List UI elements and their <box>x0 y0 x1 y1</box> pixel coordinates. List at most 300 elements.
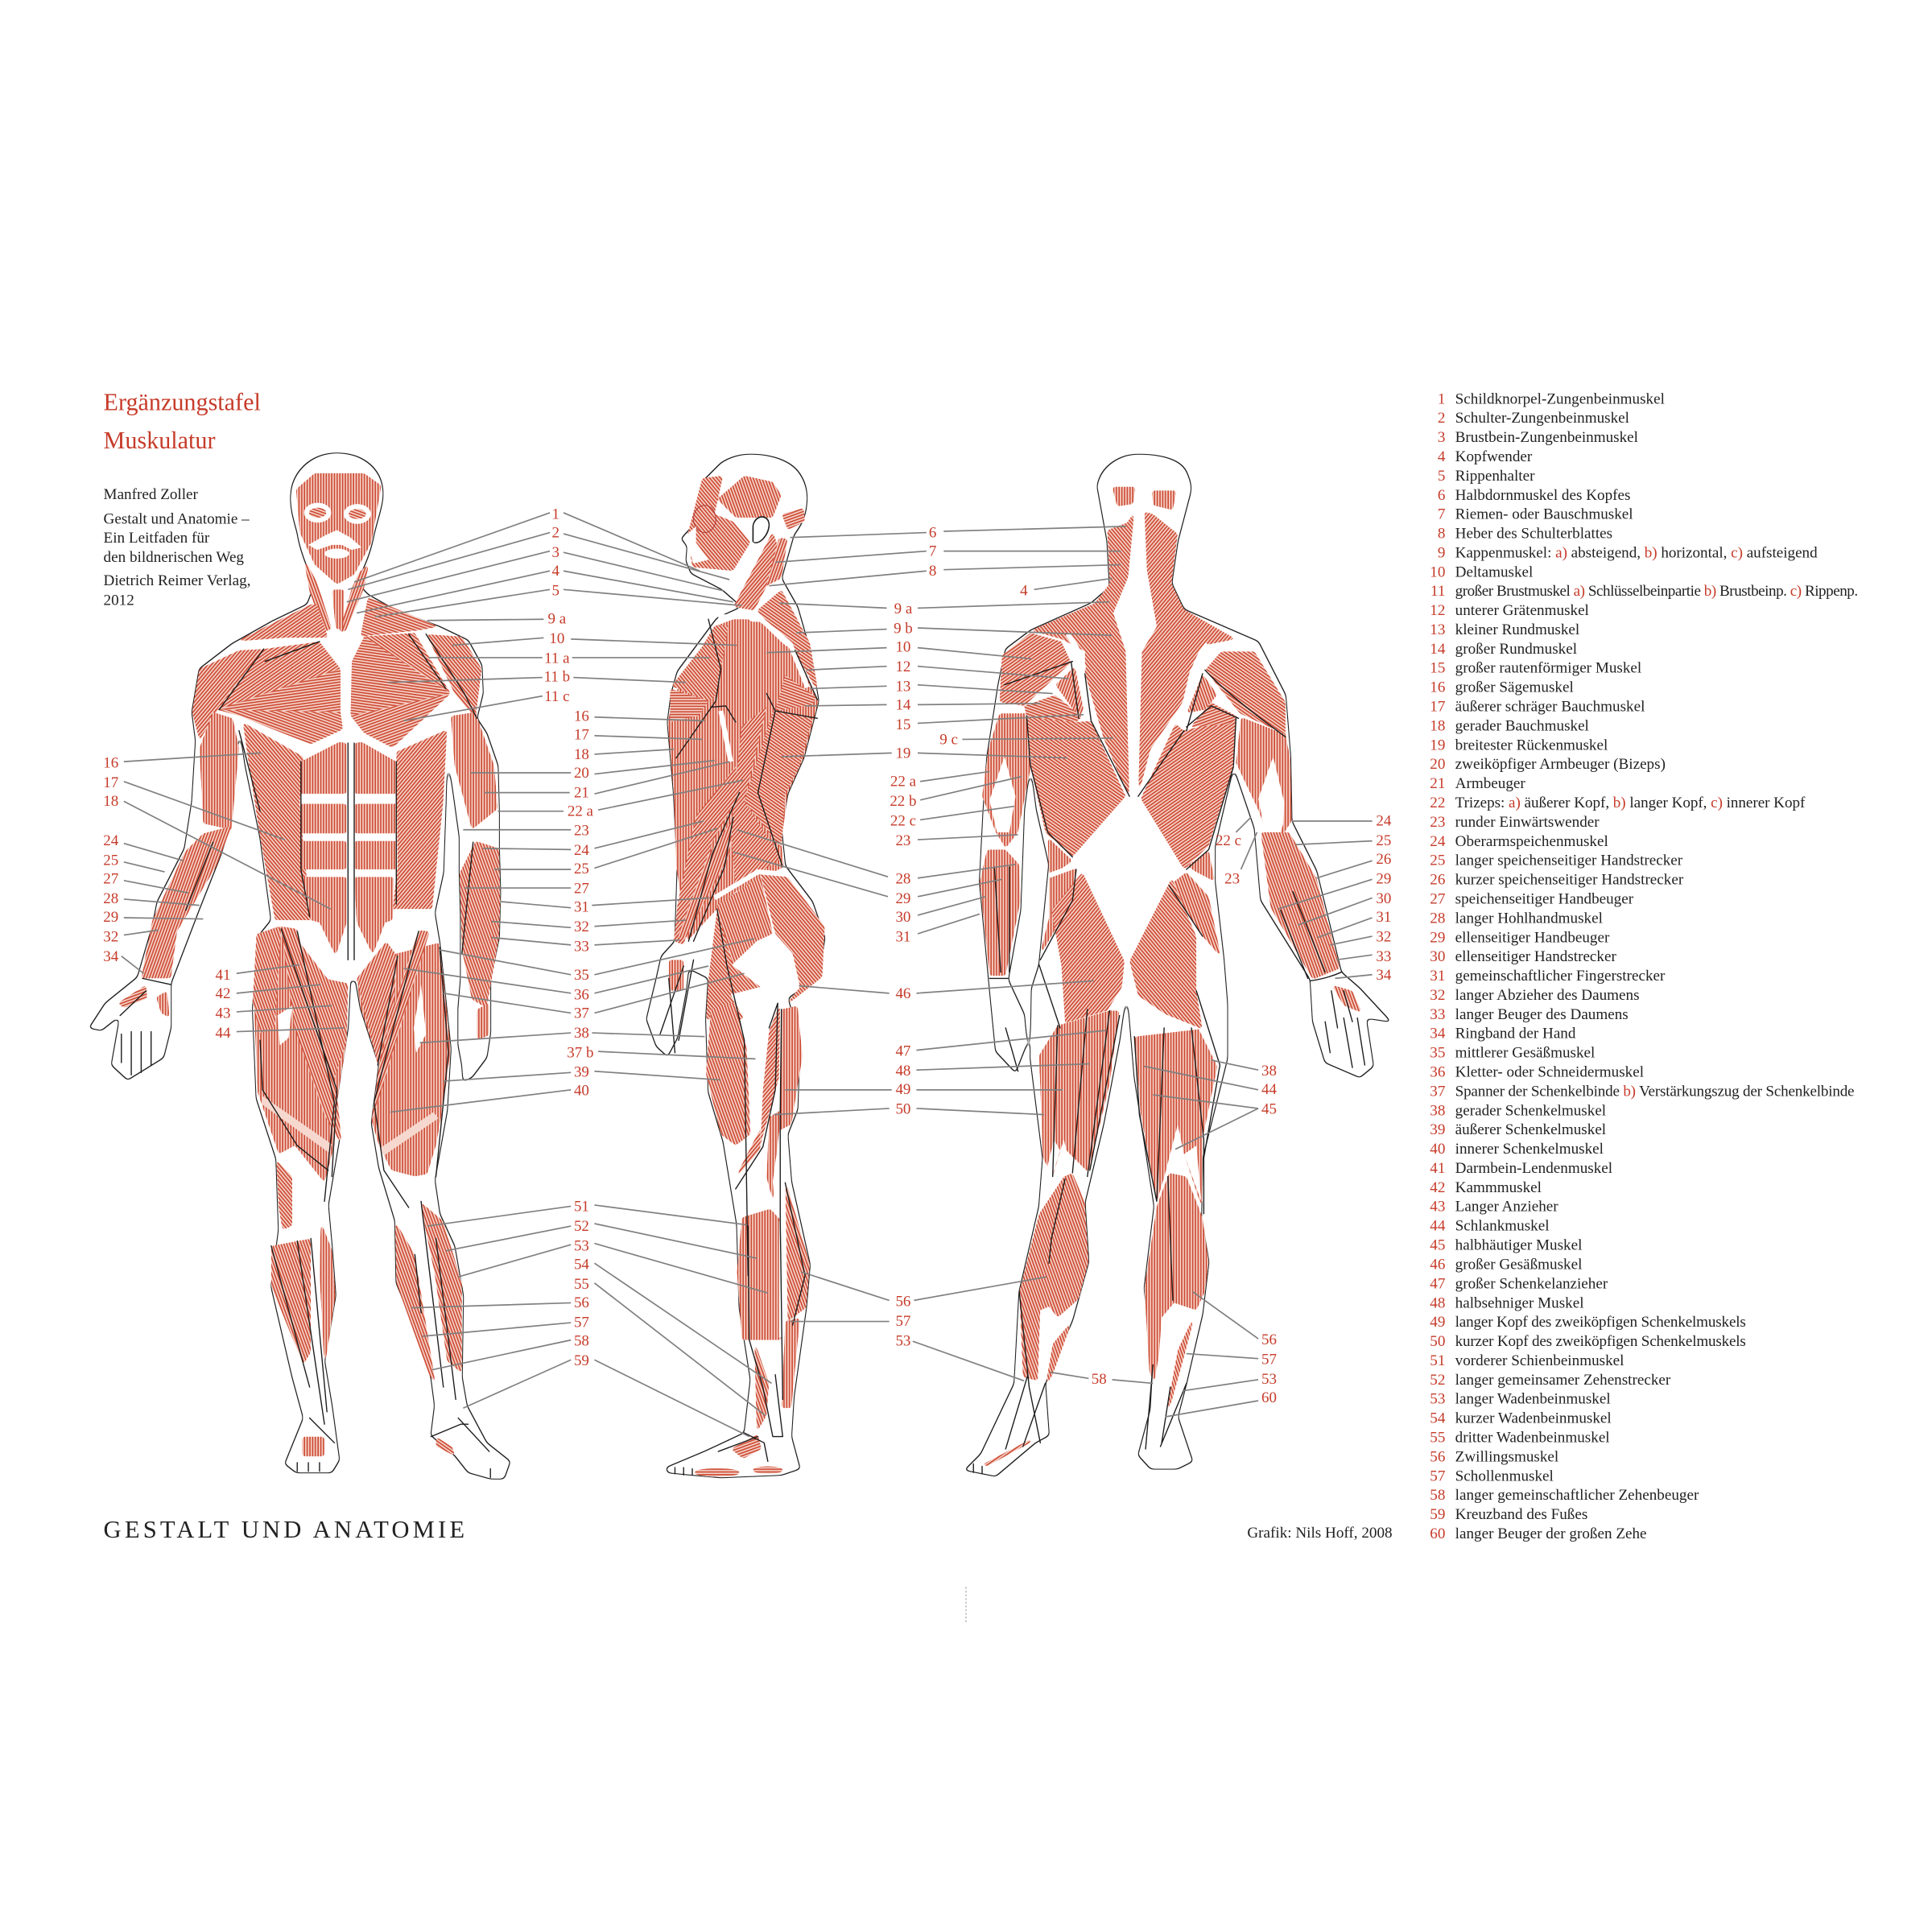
legend list of muscles 1 to 60: 35 <box>1430 1045 1445 1062</box>
number labels: first middle column: 56 <box>574 1294 589 1311</box>
number labels: first middle column: 39 <box>574 1064 589 1081</box>
biceps left <box>200 712 239 830</box>
number labels: right of back figure: 44 <box>1261 1081 1278 1098</box>
legend list of muscles 1 to 60: Schildknorpel-Zungenbeinmuskel <box>1455 390 1665 407</box>
hamstrings right <box>1134 1029 1217 1210</box>
number labels: first middle column: 32 <box>574 919 589 935</box>
calf right back <box>1145 1173 1209 1383</box>
number labels: first middle column <box>544 506 594 1369</box>
number labels: first middle column: 22 a <box>568 803 594 819</box>
number labels: right of back figure: 38 <box>1261 1063 1277 1080</box>
number labels: first middle column: 53 <box>574 1238 589 1255</box>
number labels: second middle column: 13 <box>895 679 910 696</box>
legend list of muscles 1 to 60: kurzer Wadenbeinmuskel <box>1455 1410 1612 1427</box>
biceps side <box>702 707 731 786</box>
number labels: first middle column: 11 b <box>544 668 570 685</box>
legend list of muscles 1 to 60: langer Beuger des Daumens <box>1455 1006 1629 1023</box>
legend list of muscles 1 to 60: Heber des Schulterblattes <box>1455 526 1612 543</box>
number labels: far-left column: 43 <box>216 1005 231 1022</box>
number labels: first middle column: 2 <box>552 524 559 541</box>
biceps right <box>451 712 497 830</box>
number labels: second middle column: 29 <box>895 890 910 907</box>
infraspinatus side <box>775 675 816 711</box>
short head side <box>766 1109 782 1210</box>
legend list of muscles 1 to 60: 14 <box>1430 641 1446 658</box>
legend list of muscles 1 to 60: 50 <box>1430 1333 1445 1350</box>
deltoid left <box>192 649 264 741</box>
vastus left lower <box>276 1159 292 1230</box>
number labels: second middle column: 22 b <box>890 793 917 810</box>
windpipe muscles <box>332 589 345 630</box>
number labels: right of back figure: 24 <box>1376 813 1392 830</box>
pectoral right <box>350 633 451 748</box>
face and skull muscles <box>296 473 382 584</box>
legend list of muscles 1 to 60: 2 <box>1438 410 1445 427</box>
number labels: first middle column: 10 <box>549 630 564 647</box>
number labels: second middle column: 50 <box>895 1101 910 1118</box>
legend list of muscles 1 to 60: 11 <box>1430 583 1445 600</box>
forearm side two <box>678 819 733 938</box>
deltoid right back <box>1205 651 1286 734</box>
legend list of muscles 1 to 60: Darmbein-Lendenmuskel <box>1455 1160 1612 1177</box>
gluteus medius left <box>1039 867 1076 957</box>
ear <box>753 517 769 543</box>
number labels: far-left column <box>103 755 231 1042</box>
book title footer: GESTALT UND ANATOMIE <box>104 1516 468 1543</box>
knee band right <box>380 1113 439 1155</box>
number labels: far-left column: 28 <box>103 890 118 907</box>
legend list of muscles 1 to 60: innerer Schenkelmuskel <box>1455 1141 1604 1158</box>
legend list of muscles 1 to 60: 19 <box>1430 737 1445 753</box>
legend list of muscles 1 to 60: 45 <box>1430 1237 1445 1254</box>
pectoral left <box>217 642 343 745</box>
legend list of muscles 1 to 60: Schlankmuskel <box>1455 1218 1550 1235</box>
number labels: second middle column: 30 <box>895 909 910 926</box>
legend list of muscles 1 to 60: Langer Anzieher <box>1455 1199 1558 1216</box>
knee band left <box>262 1096 332 1153</box>
deltoid right <box>426 634 481 718</box>
legend list of muscles 1 to 60: 58 <box>1430 1487 1445 1504</box>
triceps right <box>1236 717 1292 849</box>
lower pectoral side <box>670 688 708 722</box>
legend list of muscles 1 to 60: langer gemeinsamer Zehenstrecker <box>1455 1372 1671 1389</box>
number labels: second middle column: 9 b <box>894 621 913 638</box>
legend list of muscles 1 to 60: äußerer Schenkelmuskel <box>1455 1121 1606 1138</box>
calf inner right <box>395 1221 436 1386</box>
occipital side <box>782 508 805 530</box>
legend list of muscles 1 to 60: 44 <box>1430 1218 1446 1235</box>
legend list of muscles 1 to 60: Schollenmuskel <box>1455 1468 1554 1484</box>
legend list of muscles 1 to 60: 1 <box>1438 390 1445 407</box>
soleus left back <box>1045 1320 1072 1387</box>
legend list of muscles 1 to 60: 21 <box>1430 775 1445 792</box>
number labels: far-left column: 44 <box>216 1025 231 1042</box>
quadriceps side <box>706 1002 750 1146</box>
side body outline <box>646 455 825 1477</box>
occipital right <box>1152 490 1177 510</box>
hamstring tendon right <box>1184 1146 1201 1201</box>
neck muscles right <box>340 564 369 632</box>
legend list of muscles 1 to 60: 4 <box>1438 448 1446 465</box>
legend list of muscles 1 to 60: Schulter-Zungenbeinmuskel <box>1455 410 1629 427</box>
legend list of muscles 1 to 60: halbhäutiger Muskel <box>1455 1237 1582 1254</box>
number labels: first middle column: 27 <box>574 881 589 898</box>
nose mouth highlights side <box>683 526 708 564</box>
number labels: right of back figure: 25 <box>1376 832 1391 849</box>
legend list of muscles 1 to 60: 33 <box>1430 1006 1445 1023</box>
occipital left <box>1113 487 1136 506</box>
trapezius left <box>235 605 328 642</box>
legend list of muscles 1 to 60: gemeinschaftlicher Fingerstrecker <box>1455 968 1666 985</box>
side white gaps <box>715 617 807 1338</box>
forearm left back <box>980 849 1021 976</box>
legend list of muscles 1 to 60: Kopfwender <box>1455 448 1533 465</box>
number labels: first middle column: 3 <box>552 544 559 561</box>
number labels: second middle column: 57 <box>895 1313 910 1330</box>
legend list of muscles 1 to 60: 9 <box>1438 544 1445 561</box>
legend list of muscles 1 to 60: großer Rundmuskel <box>1455 641 1577 658</box>
number labels: second middle column: 49 <box>895 1081 910 1098</box>
legend list of muscles 1 to 60: vorderer Schienbeinmuskel <box>1455 1352 1624 1369</box>
sartorius left <box>281 927 342 1146</box>
teres left <box>1024 695 1083 724</box>
legend list of muscles 1 to 60: Trizeps: a) äußerer Kopf, b) langer Kopf, c) innerer Kopf <box>1455 795 1806 811</box>
forearm right <box>460 841 501 1008</box>
number labels: far-left column: 18 <box>103 793 118 810</box>
legend list of muscles 1 to 60: ellenseitiger Handstrecker <box>1455 948 1616 965</box>
rectus abdominis <box>301 742 396 956</box>
number labels: second middle column: 9 c <box>939 731 958 748</box>
legend list of muscles 1 to 60: 23 <box>1430 814 1445 831</box>
leader lines: middle labels to side figure <box>564 513 927 1437</box>
back of neck side <box>766 538 787 586</box>
number labels: second middle column: 12 <box>895 658 910 675</box>
legend list of muscles 1 to 60: 41 <box>1430 1160 1445 1177</box>
number labels: far-left column: 41 <box>216 967 231 984</box>
peroneal side <box>754 1340 769 1433</box>
tensor fasciae side <box>706 909 761 1019</box>
infraspinatus right <box>1187 674 1217 713</box>
back interior contour lines <box>973 662 1364 1474</box>
graphic credit: Grafik: Nils Hoff, 2008 <box>1247 1525 1393 1542</box>
number labels: second middle column: 14 <box>895 697 911 714</box>
number labels: second middle column: 19 <box>895 745 910 762</box>
legend list of muscles 1 to 60: ellenseitiger Handbeuger <box>1455 929 1610 946</box>
hamstring tendon left <box>1046 1139 1060 1191</box>
legend list of muscles 1 to 60: 20 <box>1430 756 1445 773</box>
book reference text block: Dietrich Reimer Verlag, <box>104 572 250 589</box>
teres right <box>1190 702 1238 727</box>
number labels: first middle column: 4 <box>552 563 560 580</box>
legend list of muscles 1 to 60: Kammmuskel <box>1455 1179 1542 1196</box>
legend list of muscles 1 to 60: Halbdornmuskel des Kopfes <box>1455 487 1630 504</box>
side muscles <box>667 476 825 1477</box>
legend list of muscles 1 to 60: 30 <box>1430 948 1445 965</box>
front figure <box>89 453 510 1479</box>
flank right <box>1187 849 1215 881</box>
number labels: right of back figure: 22 c <box>1216 832 1241 849</box>
side figure <box>646 455 825 1477</box>
number labels: second middle column: 4 <box>1020 582 1028 599</box>
number labels: right of back figure: 34 <box>1376 967 1392 984</box>
number labels: first middle column: 52 <box>574 1218 589 1235</box>
legend list of muscles 1 to 60: Deltamuskel <box>1455 564 1533 580</box>
number labels: second middle column: 48 <box>895 1063 910 1080</box>
legend list of muscles 1 to 60: 8 <box>1438 526 1445 543</box>
legend list of muscles 1 to 60: 25 <box>1430 852 1445 869</box>
book reference text block: 2012 <box>104 592 134 609</box>
biceps femoris side <box>779 1005 803 1131</box>
number labels: far-left column: 25 <box>103 852 118 869</box>
legend list of muscles 1 to 60: gerader Schenkelmuskel <box>1455 1102 1606 1119</box>
side interior contour lines <box>660 619 817 1475</box>
book reference text block <box>104 486 250 609</box>
legend list of muscles 1 to 60: langer Hohlhandmuskel <box>1455 910 1603 927</box>
soleus side <box>782 1318 800 1408</box>
gastrocnemius side <box>785 1178 810 1322</box>
number labels: far-left column: 17 <box>103 774 118 791</box>
legend list of muscles 1 to 60: 56 <box>1430 1448 1445 1465</box>
legend list of muscles 1 to 60: großer rautenförmiger Muskel <box>1455 660 1641 677</box>
legend list of muscles 1 to 60: Oberarmspeichenmuskel <box>1455 833 1608 850</box>
number labels: first middle column: 38 <box>574 1025 589 1042</box>
legend list of muscles 1 to 60: langer Abzieher des Daumens <box>1455 987 1640 1004</box>
shin muscles left <box>271 1238 311 1364</box>
legend list of muscles 1 to 60: äußerer schräger Bauchmuskel <box>1455 699 1645 716</box>
calf inner left <box>320 1221 336 1370</box>
legend list of muscles 1 to 60: 49 <box>1430 1314 1445 1331</box>
eye sockets and facial highlights <box>304 503 371 559</box>
legend list of muscles 1 to 60: 60 <box>1430 1525 1445 1542</box>
text layer <box>103 389 1858 1623</box>
gluteus medius side <box>717 876 773 966</box>
legend list of muscles 1 to 60: 38 <box>1430 1102 1445 1119</box>
front body outline <box>89 453 510 1479</box>
number labels: first middle column: 17 <box>574 726 589 743</box>
title: Muskulatur <box>104 427 216 454</box>
leader lines: labels to back figure <box>913 526 1373 1417</box>
legend list of muscles 1 to 60: großer Gesäßmuskel <box>1455 1257 1582 1274</box>
number labels: right of back figure <box>1216 813 1392 1406</box>
legend list of muscles 1 to 60: 31 <box>1430 968 1445 985</box>
white patch on left thigh <box>278 1005 292 1045</box>
pectoral side <box>671 625 729 701</box>
number labels: second middle column <box>890 524 1107 1388</box>
gluteus maximus right <box>1129 878 1203 1029</box>
legend list of muscles 1 to 60: gerader Bauchmuskel <box>1455 718 1589 735</box>
legend list of muscles 1 to 60: 28 <box>1430 910 1445 927</box>
legend list of muscles 1 to 60: 52 <box>1430 1372 1445 1389</box>
legend list of muscles 1 to 60: 3 <box>1438 429 1445 446</box>
number labels: second middle column: 58 <box>1092 1371 1107 1388</box>
number labels: right of back figure: 56 <box>1261 1331 1277 1348</box>
torso base side <box>667 616 819 941</box>
number labels: first middle column: 58 <box>574 1332 589 1349</box>
oblique side <box>731 707 782 888</box>
number labels: first middle column: 31 <box>574 899 589 916</box>
legend list of muscles 1 to 60: 6 <box>1438 487 1445 504</box>
legend list of muscles 1 to 60: 36 <box>1430 1064 1445 1081</box>
number labels: first middle column: 9 a <box>548 610 567 627</box>
legend list of muscles 1 to 60: 57 <box>1430 1468 1446 1484</box>
number labels: second middle column: 46 <box>895 985 910 1002</box>
legend list of muscles 1 to 60: Brustbein-Zungenbeinmuskel <box>1455 429 1638 446</box>
number labels: first middle column: 5 <box>552 582 559 599</box>
legend list of muscles 1 to 60: 53 <box>1430 1391 1445 1408</box>
trapezius right <box>1138 511 1236 796</box>
legend list of muscles 1 to 60: 54 <box>1430 1410 1446 1427</box>
number labels: first middle column: 21 <box>574 784 589 801</box>
number labels: first middle column: 20 <box>574 765 589 782</box>
legend list of muscles 1 to 60: Armbeuger <box>1455 775 1525 792</box>
number labels: first middle column: 37 b <box>567 1044 594 1061</box>
sartorius tail side <box>733 1129 761 1182</box>
trapezius right <box>361 597 440 637</box>
front interior contour lines <box>120 634 490 1477</box>
legend list of muscles 1 to 60: 7 <box>1438 506 1446 523</box>
legend list of muscles 1 to 60: 12 <box>1430 602 1445 619</box>
legend list of muscles 1 to 60: dritter Wadenbeinmuskel <box>1455 1429 1610 1446</box>
number labels: right of back figure: 57 <box>1261 1351 1277 1368</box>
face muscles side <box>687 476 750 571</box>
lower leg front side <box>737 1209 782 1340</box>
legend list of muscles 1 to 60: 29 <box>1430 929 1445 946</box>
latissimus right <box>1141 717 1236 869</box>
legend list of muscles 1 to 60: kurzer speichenseitiger Handstrecker <box>1455 872 1684 889</box>
number labels: right of back figure: 29 <box>1376 870 1391 887</box>
number labels: right of back figure: 60 <box>1261 1389 1277 1406</box>
shin muscles right <box>420 1201 462 1373</box>
legend list of muscles 1 to 60: runder Einwärtswender <box>1455 814 1600 831</box>
number labels: far-left column: 32 <box>103 928 118 945</box>
book reference text block: Gestalt und Anatomie – <box>104 511 250 528</box>
legend list of muscles 1 to 60: 16 <box>1430 679 1445 696</box>
thigh right base <box>357 943 451 1177</box>
legend list of muscles 1 to 60: 37 <box>1430 1083 1446 1100</box>
foot muscle back <box>980 1438 1033 1467</box>
legend list of muscles 1 to 60: großer Sägemuskel <box>1455 679 1574 696</box>
sartorius right <box>372 930 430 1121</box>
number labels: second middle column: 9 a <box>894 601 913 617</box>
legend list of muscles 1 to 60: Ringband der Hand <box>1455 1026 1576 1042</box>
legend list of muscles 1 to 60: 47 <box>1430 1275 1446 1292</box>
number labels: right of back figure: 45 <box>1261 1101 1277 1118</box>
number labels: right of back figure: 33 <box>1376 948 1391 965</box>
hand thumb muscle <box>118 985 147 1008</box>
book reference text block: Manfred Zoller <box>104 486 199 503</box>
number labels: first middle column: 23 <box>574 823 589 840</box>
legend list of muscles 1 to 60: kleiner Rundmuskel <box>1455 621 1579 638</box>
legend list of muscles 1 to 60: Kletter- oder Schneidermuskel <box>1455 1064 1644 1081</box>
number labels: first middle column: 11 a <box>544 650 570 667</box>
book reference text block: den bildnerischen Weg <box>104 549 244 566</box>
triceps left <box>982 713 1032 848</box>
number labels: second middle column: 53 <box>895 1332 910 1349</box>
legend list of muscles 1 to 60: Riemen- oder Bauschmuskel <box>1455 506 1633 523</box>
number labels: second middle column: 56 <box>895 1293 910 1310</box>
legend list of muscles 1 to 60: halbsehniger Muskel <box>1455 1294 1584 1311</box>
number labels: right of back figure: 31 <box>1376 909 1391 926</box>
front muscles <box>118 473 501 1456</box>
legend list of muscles 1 to 60: 27 <box>1430 891 1446 908</box>
number labels: first middle column: 25 <box>574 861 589 877</box>
number labels: first middle column: 37 <box>574 1005 589 1022</box>
legend list of muscles 1 to 60: langer speichenseitiger Handstrecker <box>1455 852 1683 869</box>
number labels: far-left column: 42 <box>216 985 231 1002</box>
gluteus maximus side <box>761 874 825 1009</box>
page fold mark <box>965 1587 967 1623</box>
number labels: second middle column: 22 a <box>890 774 917 791</box>
number labels: first middle column: 57 <box>574 1314 589 1331</box>
foot sole muscles <box>694 1467 784 1477</box>
legend list of muscles 1 to 60: 17 <box>1430 699 1446 716</box>
legend list of muscles 1 to 60: 51 <box>1430 1352 1445 1369</box>
legend list of muscles 1 to 60: 42 <box>1430 1179 1445 1196</box>
oblique left <box>243 722 311 920</box>
gluteus maximus left <box>1051 872 1125 1023</box>
forearm right back <box>1261 832 1340 980</box>
adductors left <box>296 938 348 1086</box>
thigh left base <box>254 927 348 1183</box>
legend list of muscles 1 to 60: großer Brustmuskel a) Schlüsselbeinpartie b) Brustbeinp. c) Rippenp. <box>1455 583 1858 600</box>
legend list of muscles 1 to 60: zweiköpfiger Armbeuger (Bizeps) <box>1455 756 1666 773</box>
legend list of muscles 1 to 60: speichenseitiger Handbeuger <box>1455 891 1634 908</box>
number labels: second middle column: 47 <box>895 1043 910 1060</box>
legend list of muscles 1 to 60: unterer Grätenmuskel <box>1455 602 1589 619</box>
thigh left tensor <box>253 927 281 1033</box>
deltoid side <box>720 621 798 722</box>
legend list of muscles 1 to 60: Spanner der Schenkelbinde b) Verstärkungszug der Schenkelbinde <box>1455 1083 1855 1100</box>
legend list of muscles 1 to 60: Kreuzband des Fußes <box>1455 1506 1587 1523</box>
number labels: first middle column: 36 <box>574 986 589 1003</box>
number labels: second middle column: 15 <box>895 716 910 733</box>
hand thenar side <box>669 960 683 991</box>
hand muscle right of palm <box>156 991 170 1018</box>
number labels: first middle column: 18 <box>574 746 589 763</box>
legend list of muscles 1 to 60: 39 <box>1430 1121 1445 1138</box>
legend list of muscles 1 to 60: langer Beuger der großen Zehe <box>1455 1525 1647 1542</box>
number labels: far-left column: 29 <box>103 909 118 926</box>
legend list of muscles 1 to 60: 18 <box>1430 718 1445 735</box>
title: Ergänzungstafel <box>104 389 261 416</box>
legend list of muscles 1 to 60: 55 <box>1430 1429 1445 1446</box>
legend list of muscles 1 to 60: 34 <box>1430 1026 1446 1042</box>
back body outline <box>964 455 1391 1476</box>
trochanter highlight <box>742 945 784 987</box>
number labels: far-left column: 34 <box>103 948 119 965</box>
number labels: first middle column: 16 <box>574 708 589 724</box>
legend list of muscles 1 to 60: Rippenhalter <box>1455 468 1535 485</box>
number labels: first middle column: 1 <box>552 506 559 522</box>
number labels: second middle column: 22 c <box>890 813 916 830</box>
legend list of muscles 1 to 60: 40 <box>1430 1141 1445 1158</box>
legend list of muscles 1 to 60 <box>1430 390 1858 1542</box>
number labels: second middle column: 31 <box>895 928 910 945</box>
number labels: second middle column: 7 <box>929 543 936 559</box>
triceps tendon right <box>1258 757 1284 849</box>
trapezius left <box>1030 511 1134 799</box>
legend list of muscles 1 to 60: langer Wadenbeinmuskel <box>1455 1391 1611 1408</box>
number labels: first middle column: 11 c <box>544 688 570 705</box>
sternomastoid side <box>733 531 782 610</box>
triceps tendon left <box>989 757 1016 832</box>
number labels: right of back figure: 23 <box>1224 870 1240 887</box>
white patch on right thigh <box>414 985 426 1053</box>
number labels: right of back figure: 32 <box>1376 928 1391 945</box>
gluteus medius right <box>1169 872 1221 957</box>
legend list of muscles 1 to 60: 32 <box>1430 987 1445 1004</box>
legend list of muscles 1 to 60: 59 <box>1430 1506 1445 1523</box>
